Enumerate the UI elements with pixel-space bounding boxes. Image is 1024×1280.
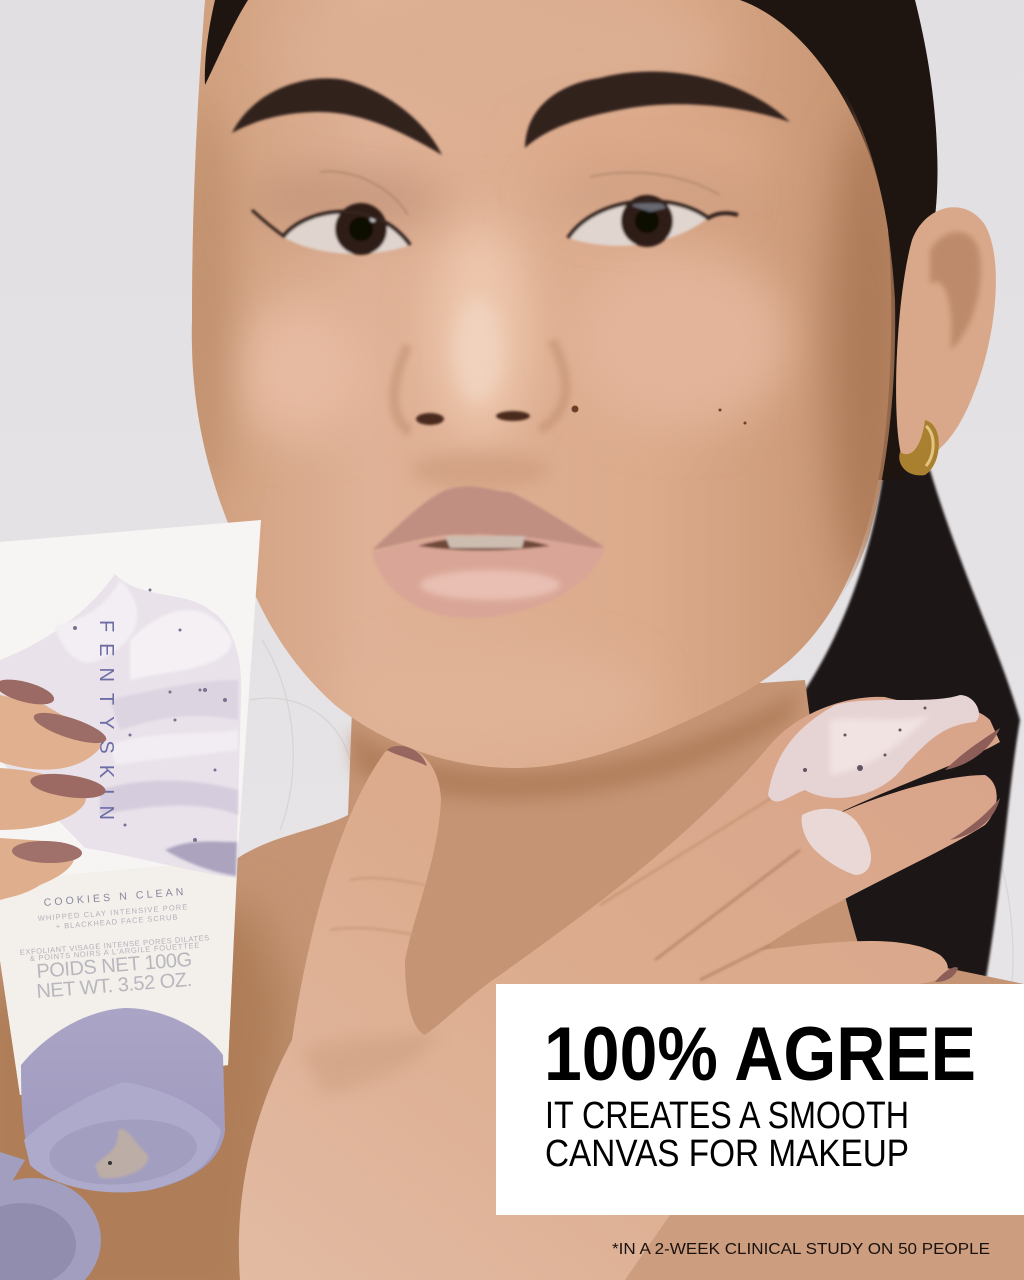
ear with earring: [896, 207, 996, 475]
net weight: [36, 949, 193, 1003]
product description: + BLACKHEAD FACE SCRUB: [55, 912, 178, 931]
moles: [572, 406, 746, 424]
nostrils: [416, 413, 444, 425]
fingers holding tube: [0, 675, 109, 900]
product description: WHIPPED CLAY INTENSIVE PORE: [37, 902, 188, 923]
callout box: CANVAS FOR MAKEUP: [545, 1133, 909, 1175]
callout box: [496, 984, 1024, 1215]
nail on raised finger: [387, 746, 427, 766]
left eyebrow: [232, 78, 442, 155]
net weight: POIDS NET 100G: [36, 949, 193, 983]
right eye: [568, 173, 738, 247]
footnote: *IN A 2-WEEK CLINICAL STUDY ON 50 PEOPLE: [612, 1241, 990, 1258]
finger two: [0, 768, 86, 830]
product description: EXFOLIANT VISAGE INTENSE PORES DILATES: [19, 933, 210, 957]
hand: [239, 697, 1000, 1280]
nail one: [0, 675, 57, 709]
nail three: [29, 770, 107, 802]
nozzle residue: [95, 1129, 148, 1178]
product name: COOKIES N CLEAN: [43, 886, 184, 909]
net weight: NET WT. 3.52 OZ.: [36, 969, 193, 1003]
scrub artwork: [0, 574, 241, 878]
earring: [899, 420, 939, 475]
tube body: [0, 520, 261, 1095]
right eyebrow: [525, 71, 790, 148]
scrub on fingers: [768, 695, 979, 875]
lips: [372, 486, 605, 618]
finger three: [0, 838, 75, 900]
product description: & POINTS NOIRS A L'ARGILE FOUETTEE: [29, 941, 200, 963]
face: [183, 0, 910, 768]
subheading: IT CREATES A SMOOTH: [545, 1095, 909, 1137]
left eye: [252, 171, 410, 255]
flyaway hair strands: [250, 640, 1013, 984]
neck and chest: [0, 680, 1024, 1280]
tube: [0, 520, 261, 1280]
cap: [21, 1008, 225, 1192]
finger one: [0, 695, 100, 770]
nail four: [12, 840, 82, 864]
nail two: [31, 707, 109, 749]
fingertip nails: [945, 728, 1000, 770]
hair top left: [205, 0, 248, 85]
flip lid: [0, 1152, 101, 1280]
ponytail hair: [801, 460, 1020, 984]
headline: 100% AGREE: [544, 1012, 976, 1097]
hair side: [735, 0, 938, 480]
product description: [19, 902, 210, 963]
brand name: FENTYSKIN: [95, 620, 117, 820]
eyebrows: [232, 71, 790, 155]
nose: [394, 298, 566, 432]
